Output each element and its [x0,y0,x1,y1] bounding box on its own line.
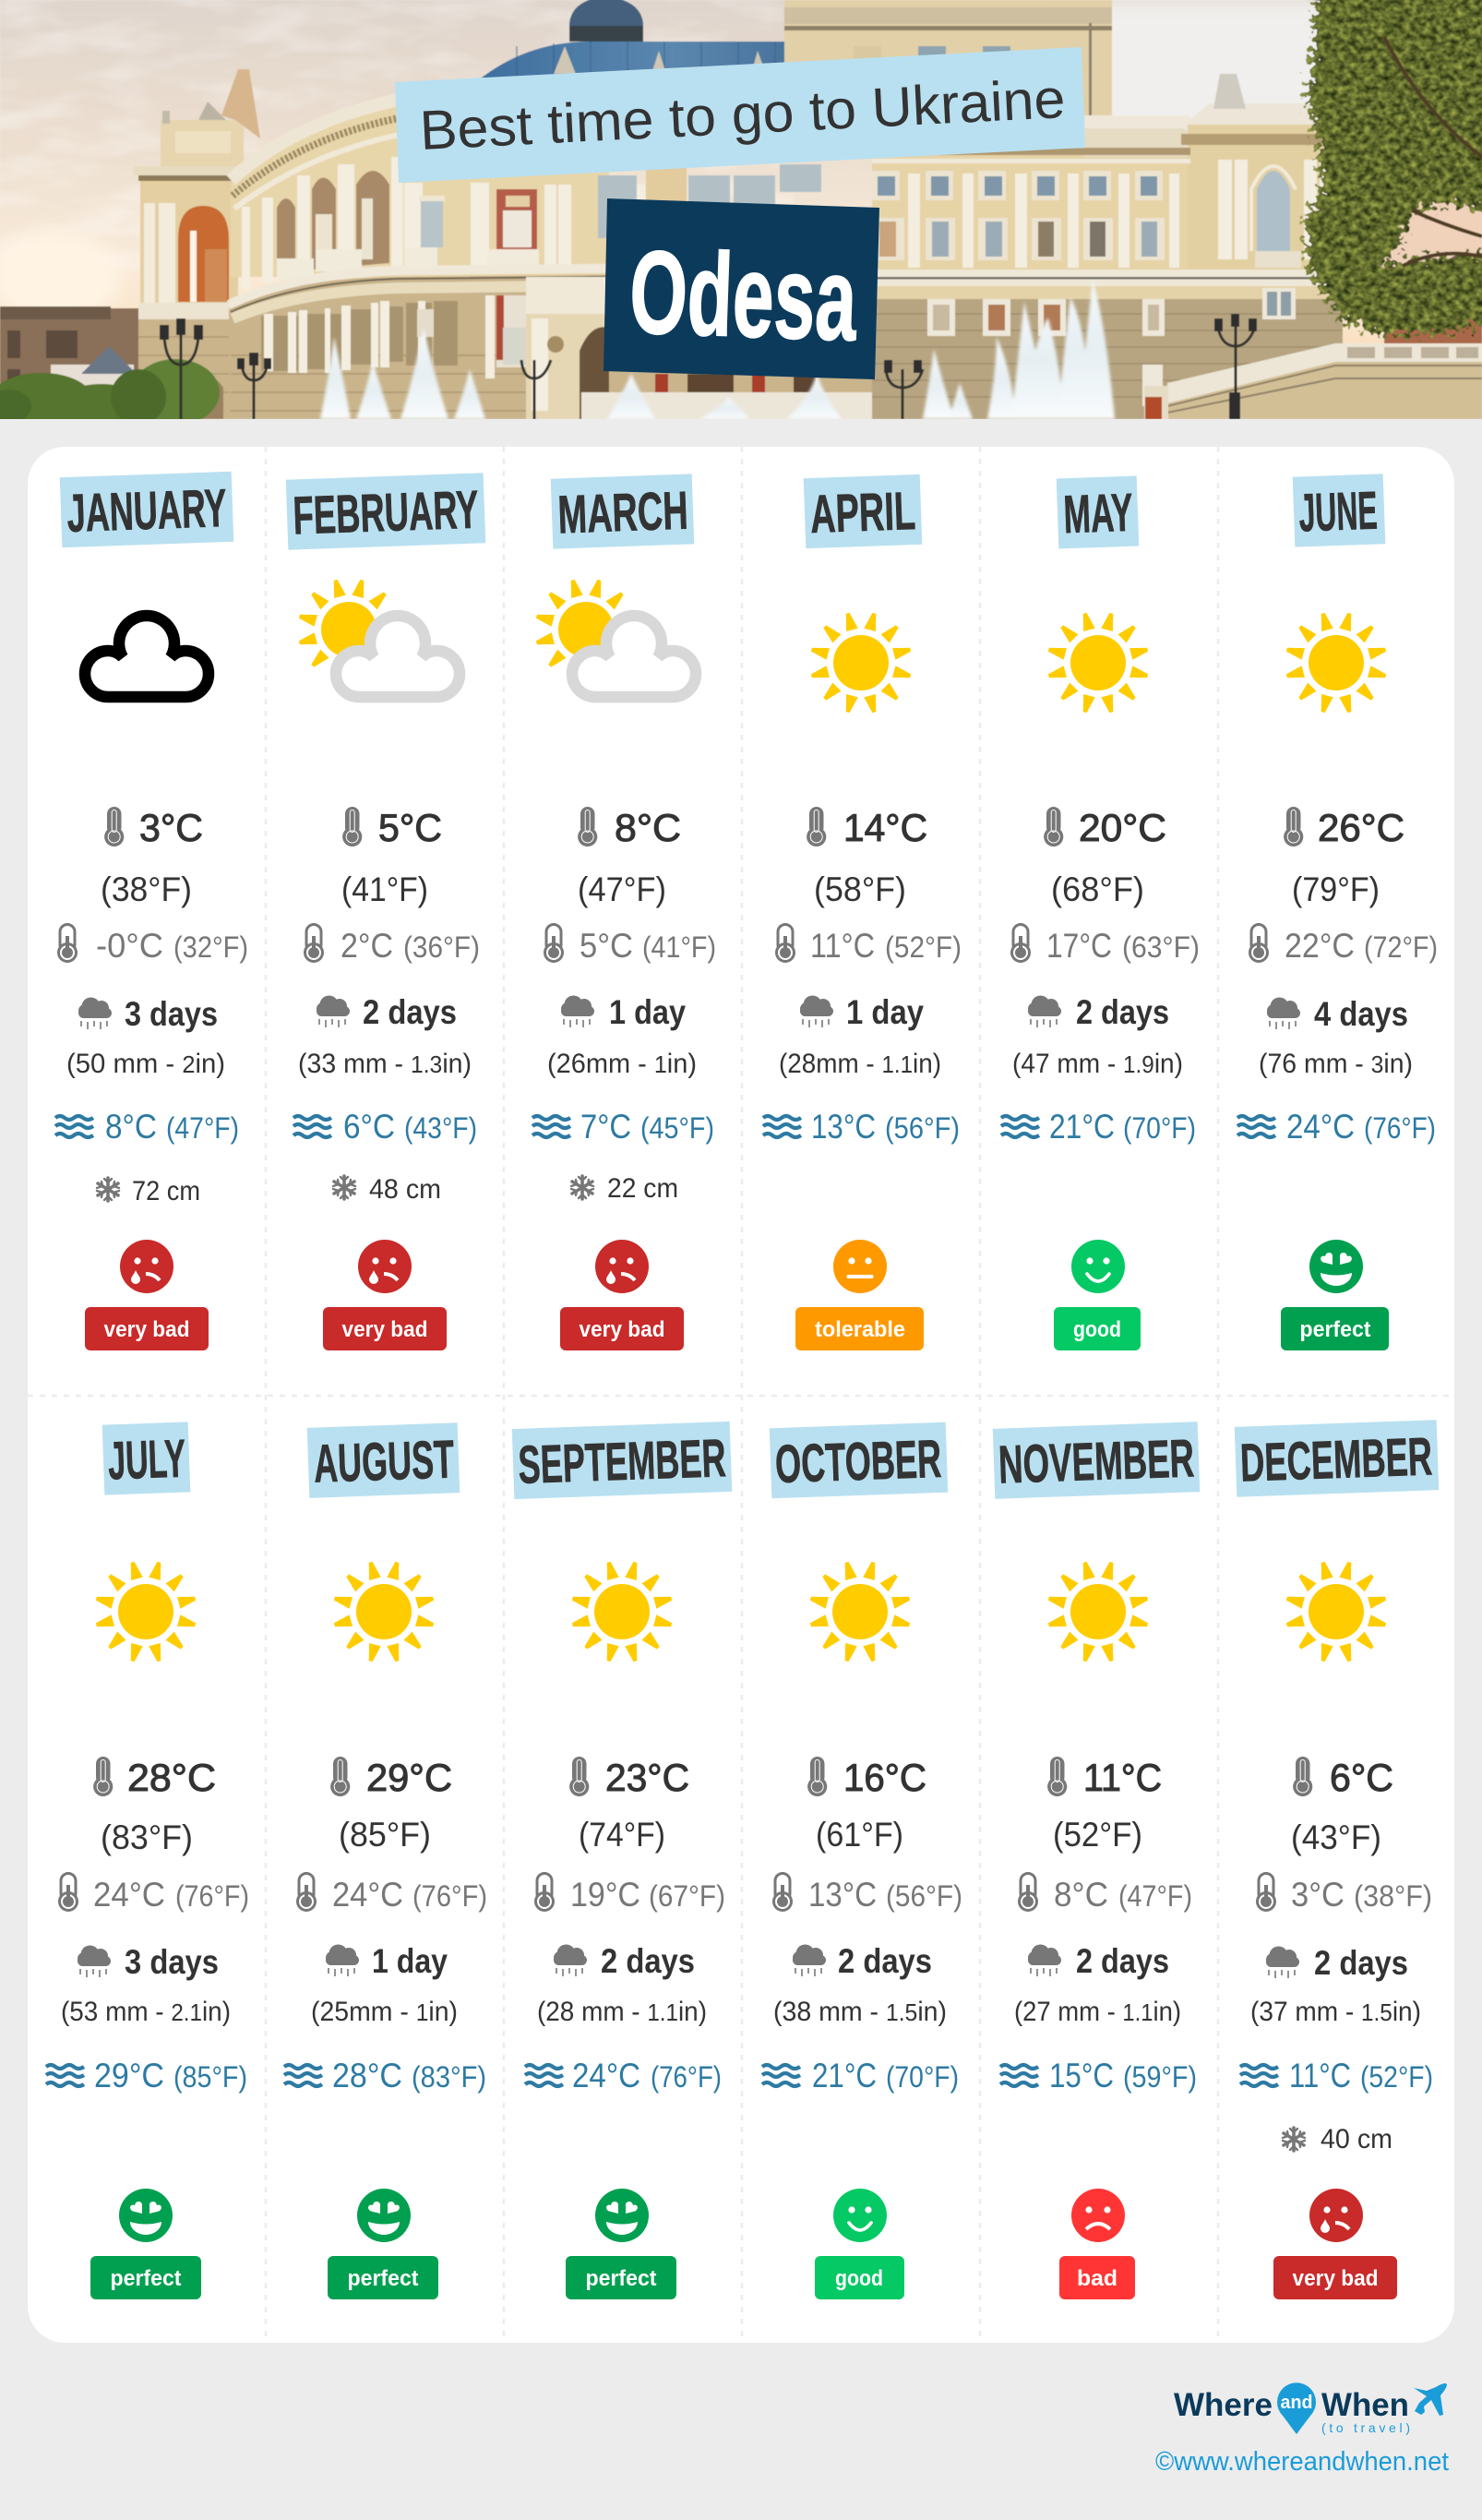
icon: sun [1285,1561,1387,1662]
rating badge: perfect [1299,1317,1371,1342]
rating badge [815,2256,904,2299]
icon: sun [1047,1561,1149,1662]
icon: sun [333,1561,435,1662]
rating face [833,2189,887,2242]
low temperature: (52°F) [885,930,962,964]
title banner: Best time to go to Ukraine [418,67,1067,162]
high temperature fahrenheit: (43°F) [1291,1818,1381,1856]
month: August [284,1422,487,2299]
rainfall: (38 mm - 1.5in) [773,1997,947,2027]
heading: January: JANUARY [66,478,228,544]
rainfall: (50 mm - 2in) [66,1049,225,1079]
icon: sun behind cloud [535,579,696,697]
heading: May: MAY [1062,483,1134,545]
sea temperature: 24°C [1286,1108,1355,1146]
rainfall: (28 mm - 1.1in) [537,1997,707,2027]
high temperature fahrenheit: (74°F) [579,1816,665,1854]
high temperature: 28°C [127,1756,216,1799]
rating badge [566,2256,676,2299]
snow depth [571,1173,678,1204]
month: July [46,1422,249,2299]
rainy days [800,993,924,1031]
logo: Where and When: When [1321,2387,1409,2423]
rating badge [795,1307,924,1350]
rating face [120,1240,173,1293]
rainy days: 4 days [1314,995,1408,1033]
rating badge [1281,1307,1389,1350]
icon: sun [571,1561,673,1662]
heading: April: APRIL [809,481,916,545]
sea temperature [1240,2057,1433,2094]
rating face [358,1240,412,1293]
low temperature [1019,1874,1192,1914]
rainy days [1028,1942,1169,1980]
rating badge [560,1307,684,1350]
rainy days [326,1942,448,1980]
month: January [55,472,248,1350]
low temperature: -0°C [96,927,163,965]
rating badge [1273,2256,1397,2299]
sea temperature [1000,2057,1197,2094]
city name: Odesa: Odesa [627,226,859,366]
sea temperature: (70°F) [886,2060,959,2094]
rating face [595,2189,649,2242]
high temperature [807,1756,926,1799]
sea temperature [46,2057,247,2094]
main white card [28,447,1454,2343]
high temperature [104,806,203,849]
snow depth: 40 cm [1321,2124,1392,2154]
rating badge [85,1307,209,1350]
high temperature [569,1756,689,1799]
rainy days [1267,995,1408,1033]
sea temperature: (52°F) [1360,2060,1433,2094]
rating badge: bad [1077,2266,1117,2291]
month: April [763,474,962,1350]
rating face [595,1240,649,1293]
rating badge [90,2256,201,2299]
heading: January [60,472,233,547]
logo: Where and When [1174,2382,1447,2435]
rating badge: tolerable [815,1317,905,1342]
rainy days: 1 day [609,993,686,1031]
rainfall: (26mm - 1in) [547,1049,697,1079]
low temperature: (56°F) [886,1879,962,1913]
heading: March [551,474,694,549]
low temperature [1011,925,1200,965]
month: March [532,474,716,1350]
rainy days: 2 days [1076,1942,1169,1980]
low temperature: (47°F) [1118,1879,1192,1913]
rainy days [793,1942,932,1980]
fountains [320,280,1115,419]
low temperature: (67°F) [649,1879,725,1913]
sea temperature: (85°F) [173,2060,247,2094]
snow depth: 22 cm [607,1173,678,1204]
low temperature: 19°C [570,1876,640,1914]
rainfall: (28mm - 1.1in) [779,1049,941,1079]
low temperature: 5°C [580,927,633,965]
rating face [1309,1240,1363,1293]
high temperature: 6°C [1330,1756,1393,1799]
sea temperature [525,2057,722,2094]
sea temperature: 6°C [343,1108,395,1146]
icon: cloud [85,616,209,697]
snow depth: 48 cm [369,1174,441,1205]
trees and brick right [1384,268,1482,351]
low temperature: (63°F) [1122,930,1200,964]
icon: sun [1285,612,1387,714]
low temperature [1249,925,1438,965]
heading: September [512,1422,732,1499]
low temperature: (36°F) [403,930,480,964]
high temperature: 11°C [1083,1756,1162,1799]
month: November [993,1422,1200,2299]
low temperature: 3°C [1291,1876,1345,1914]
rainfall: (47 mm - 1.9in) [1012,1049,1183,1079]
header photo: Odesa Opera House [0,0,1482,428]
sea temperature [763,1108,960,1146]
rainy days [317,993,457,1031]
heading: August: AUGUST [313,1429,455,1494]
rainfall: (25mm - 1in) [311,1997,458,2027]
heading: September: SEPTEMBER [517,1428,727,1495]
month: December [1235,1420,1439,2299]
rainfall: (53 mm - 2.1in) [61,1997,231,2027]
left pavilion [161,120,244,168]
right wing [872,155,1190,271]
high temperature fahrenheit: (58°F) [814,870,906,908]
terrace balustrade [1167,355,1482,419]
rainy days: 2 days [1076,993,1169,1031]
rainy days: 2 days [1314,1944,1408,1982]
sea temperature: 11°C [1289,2057,1351,2094]
rainfall: (27 mm - 1.1in) [1014,1997,1181,2027]
rating face [357,2189,411,2242]
sea temperature: 21°C [1049,1108,1115,1146]
rainy days [1028,993,1169,1031]
high temperature [578,806,681,849]
high temperature: 3°C [139,806,203,849]
icon: sun [810,612,912,714]
high temperature fahrenheit: (61°F) [816,1816,903,1854]
month: October [762,1422,962,2299]
rating badge: good [835,2266,883,2291]
heading: August [307,1422,460,1498]
rating badge [1054,1307,1141,1350]
low temperature: 17°C [1046,927,1112,965]
month: May [1001,476,1200,1350]
low temperature: 2°C [341,927,393,965]
sea temperature [1237,1108,1436,1146]
snow depth [97,1176,200,1206]
rainy days [1266,1944,1408,1982]
high temperature [807,806,927,849]
sea temperature: (76°F) [651,2060,722,2094]
low temperature: 24°C [93,1876,165,1914]
rainy days [78,995,218,1033]
heading: June [1293,474,1385,547]
low temperature: (72°F) [1364,930,1438,964]
high temperature: 20°C [1079,806,1166,849]
low temperature: (32°F) [173,930,248,964]
rating badge: perfect [585,2266,657,2291]
website credit: ©www.whereandwhen.net [1155,2447,1449,2477]
high temperature: 16°C [843,1756,926,1799]
sea temperature: (59°F) [1123,2060,1197,2094]
rating face [833,1240,887,1293]
sea temperature: 8°C [105,1108,157,1146]
heading: July [102,1422,190,1495]
rating badge [323,1307,447,1350]
high temperature fahrenheit: (83°F) [101,1818,193,1856]
rainy days: 2 days [601,1942,695,1980]
high temperature fahrenheit: (41°F) [341,870,428,908]
rainfall: (33 mm - 1.3in) [298,1049,472,1079]
sea temperature: 15°C [1049,2057,1114,2094]
low temperature: 22°C [1285,927,1355,965]
icon: sun behind cloud [298,579,460,697]
heading: February [286,473,485,550]
low temperature: (41°F) [642,930,716,964]
rating badge: very bad [341,1317,428,1342]
lamps [164,318,1255,419]
low temperature [59,925,248,965]
sea temperature: 21°C [812,2057,877,2094]
low temperature [305,925,480,965]
rating badge: perfect [111,2266,182,2291]
high temperature fahrenheit: (68°F) [1051,870,1144,908]
rainy days [561,993,686,1031]
low temperature [59,1874,249,1914]
rating face [1309,2189,1363,2242]
high temperature [1047,1756,1162,1799]
icon: sun [1047,612,1149,714]
rainy days: 3 days [125,1943,219,1981]
logo: Where and When: and [1281,2393,1312,2413]
heading: May [1057,476,1139,549]
high temperature: 23°C [605,1756,689,1799]
high temperature fahrenheit: (79°F) [1292,870,1380,908]
heading: November: NOVEMBER [998,1428,1195,1495]
sea temperature [1001,1108,1196,1146]
logo: Where and When: Where [1174,2387,1273,2423]
rating badge: very bad [103,1317,190,1342]
sea temperature: 24°C [572,2057,640,2094]
heading: April [804,474,922,548]
month: February [286,473,485,1350]
heading: February: FEBRUARY [292,480,480,546]
high temperature fahrenheit: (38°F) [101,870,192,908]
month: September [512,1422,732,2299]
rating badge: very bad [580,1317,664,1342]
rainy days: 1 day [846,993,924,1031]
rainy days [78,1943,219,1981]
left trees [0,358,220,419]
rainy days [554,1942,695,1980]
rainy days: 2 days [363,993,457,1031]
sea temperature [284,2057,486,2094]
high temperature: 8°C [615,806,681,849]
low temperature [544,925,716,965]
heading: October: OCTOBER [774,1429,942,1494]
low temperature [535,1874,725,1914]
low temperature: 8°C [1054,1876,1108,1914]
sea temperature: 7°C [580,1108,631,1146]
heading: October [770,1422,948,1498]
heading: March: MARCH [556,481,689,545]
rating badge: perfect [347,2266,419,2291]
city name: Odesa [604,198,879,379]
low temperature [773,1874,962,1914]
rainfall: (76 mm - 3in) [1259,1049,1413,1079]
sea temperature: (45°F) [640,1111,714,1145]
rating badge: good [1073,1317,1121,1342]
heading: November [993,1422,1200,1499]
high temperature fahrenheit: (47°F) [578,870,666,908]
snow depth [333,1174,441,1205]
high temperature [342,806,442,849]
sea temperature [532,1108,714,1146]
sea temperature: 29°C [94,2057,164,2094]
high temperature fahrenheit: (52°F) [1053,1816,1142,1854]
sea temperature: (70°F) [1123,1111,1196,1145]
logo: Where and When: (to travel) [1321,2420,1410,2435]
sea temperature: 28°C [332,2057,402,2094]
sea temperature: (76°F) [1364,1111,1436,1145]
sea temperature: (47°F) [166,1111,239,1145]
rating face [119,2189,173,2242]
title banner [395,47,1085,183]
high temperature: 29°C [366,1756,452,1799]
sea temperature: (56°F) [885,1111,960,1145]
heading: June: JUNE [1297,481,1379,543]
rating badge [328,2256,438,2299]
sea temperature: (43°F) [404,1111,477,1145]
sea temperature: 13°C [811,1108,876,1146]
rainfall: (37 mm - 1.5in) [1250,1997,1421,2027]
low temperature: 11°C [810,927,875,965]
high temperature: 14°C [843,806,927,849]
sea temperature: (83°F) [412,2060,486,2094]
high temperature: 26°C [1318,806,1404,849]
low temperature: (38°F) [1354,1879,1432,1913]
snow depth: 72 cm [132,1176,200,1206]
low temperature [297,1874,487,1914]
snow depth [1283,2124,1392,2154]
rating badge [1059,2256,1135,2299]
month: June [1237,474,1438,1350]
heading: July: JULY [107,1429,186,1491]
low temperature: (76°F) [175,1879,249,1913]
low temperature [777,925,962,965]
rating badge: very bad [1292,2266,1379,2291]
rainy days: 3 days [125,995,218,1033]
lower curved storey [229,272,877,419]
sea temperature [55,1108,239,1146]
icon: sun [809,1561,911,1662]
low temperature [1257,1874,1432,1914]
rainy days: 1 day [372,1942,448,1980]
high temperature: 5°C [378,806,442,849]
sea temperature [762,2057,959,2094]
rating face [1071,2189,1125,2242]
low temperature: (76°F) [412,1879,487,1913]
low temperature: 13°C [808,1876,877,1914]
rating face [1071,1240,1125,1293]
icon: sun [95,1561,197,1662]
sea temperature [293,1108,477,1146]
curved section [231,103,609,277]
low temperature: 24°C [332,1876,403,1914]
rainy days: 2 days [838,1942,932,1980]
high temperature [1293,1756,1393,1799]
high temperature fahrenheit: (85°F) [339,1816,431,1854]
